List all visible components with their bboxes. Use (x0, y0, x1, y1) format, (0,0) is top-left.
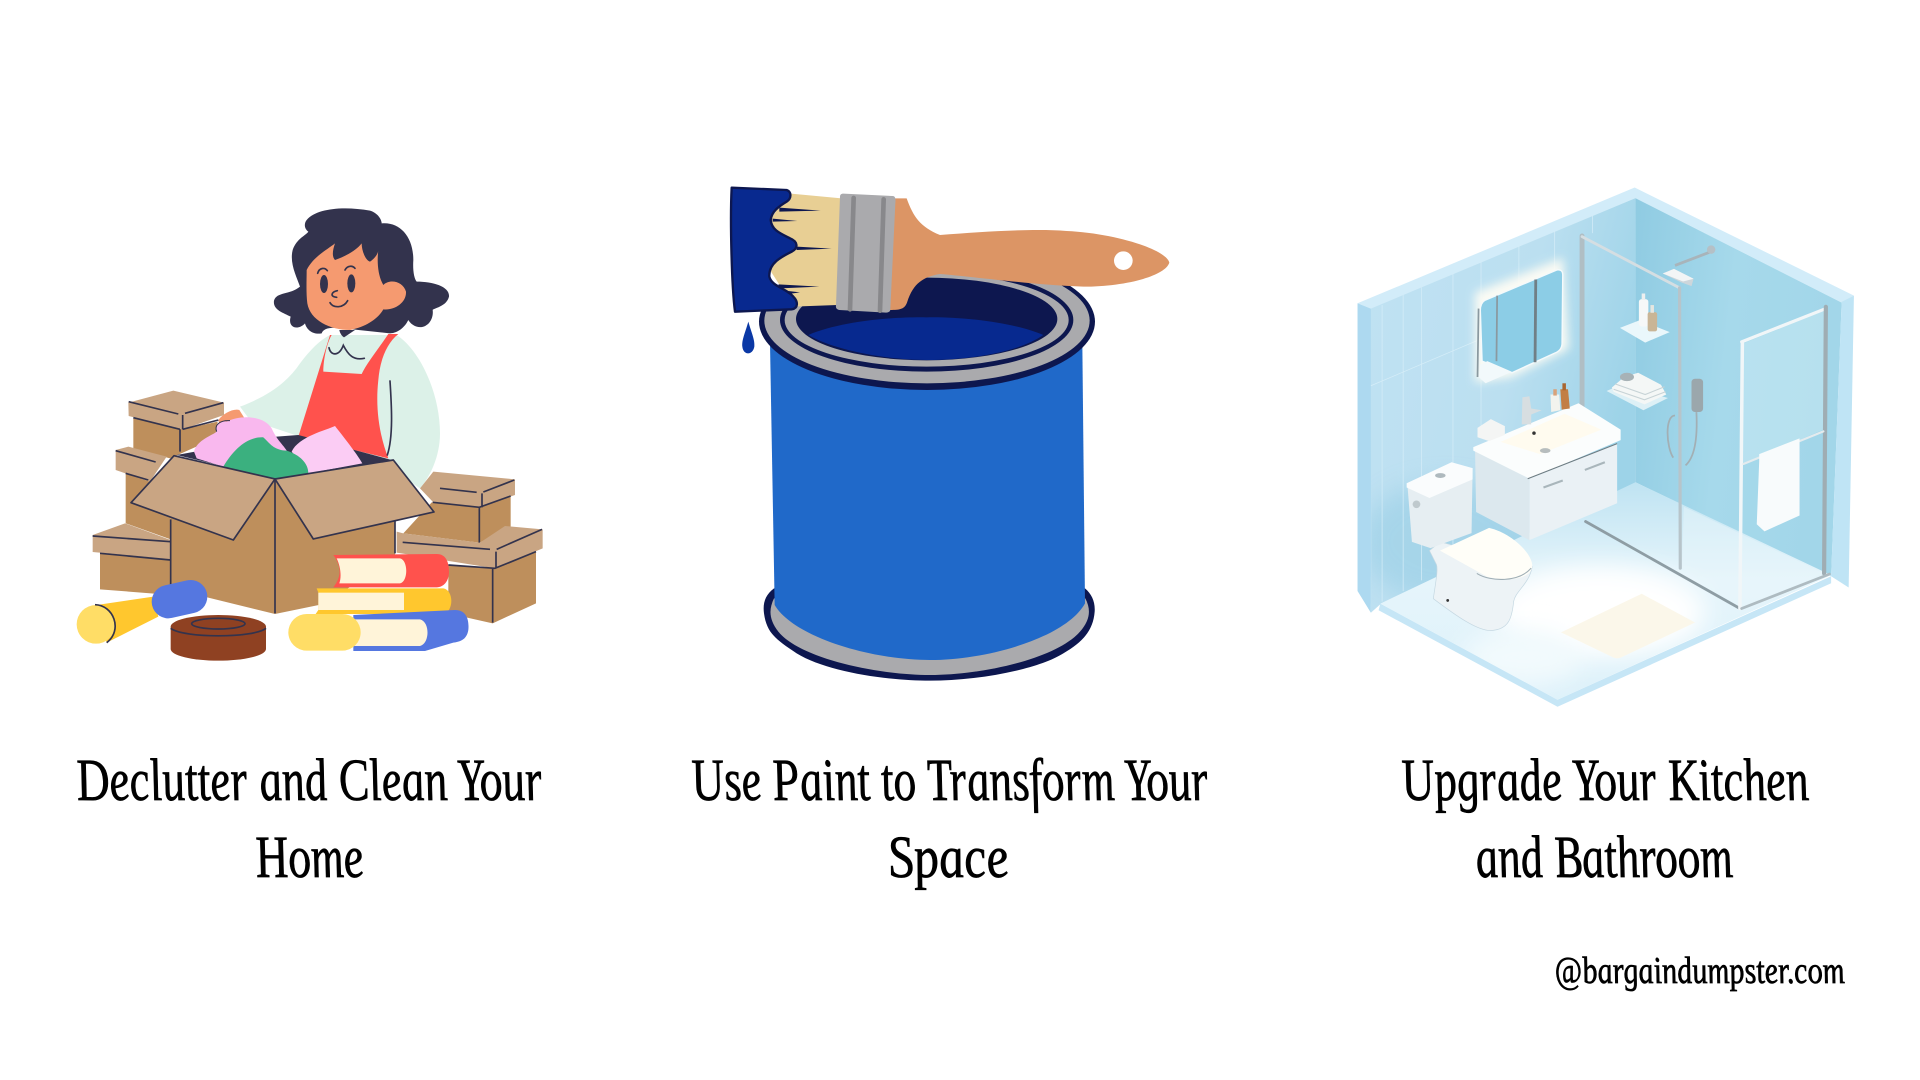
tile lines (1371, 216, 1593, 601)
can top rim and paint (759, 253, 1095, 390)
face (306, 243, 406, 330)
hair (274, 208, 449, 334)
heading: paint: Use Paint to Transform Your (686, 747, 1214, 814)
can bottom rim (764, 588, 1095, 681)
brush handle (890, 198, 1169, 310)
panel: bathroom illustration (1358, 188, 1854, 707)
brush bristles (770, 193, 842, 307)
heading: paint: Space (883, 824, 1013, 891)
heading: declutter (70, 747, 548, 891)
heading: declutter: Home (249, 824, 368, 891)
paint on brush (731, 188, 797, 312)
shelves and bottles (1607, 293, 1670, 410)
red apron (298, 334, 398, 458)
hand (218, 410, 244, 426)
shower enclosure (1582, 236, 1829, 609)
open cardboard box with clothes (131, 417, 434, 614)
stacked boxes left (93, 391, 224, 595)
brush ferrule (836, 194, 896, 313)
can body (770, 343, 1085, 660)
panel: paint can illustration (731, 188, 1169, 681)
heading: kitchen and bathroom: and Bathroom (1470, 824, 1737, 891)
collar and sleeve lines (329, 345, 392, 455)
neck shadow (339, 330, 355, 337)
website credit: @bargaindumpster.com (1551, 950, 1847, 992)
floor (1379, 482, 1831, 707)
handle hole (1114, 251, 1133, 270)
woman's shirt (240, 335, 440, 488)
heading: declutter: Declutter and Clean Your (70, 747, 548, 814)
heading: paint (686, 747, 1214, 891)
flashlight (77, 597, 191, 644)
panel: declutter illustration (77, 208, 543, 661)
room walls (1358, 188, 1854, 613)
towel (1757, 438, 1800, 531)
paint drop (742, 322, 754, 353)
heading: kitchen and bathroom (1396, 747, 1813, 891)
vanity with sink (1473, 383, 1621, 540)
bristle hairlines (773, 208, 832, 294)
toilet (1407, 462, 1532, 631)
facial features (318, 266, 355, 307)
tape roll (171, 615, 266, 661)
bath mat (1561, 594, 1695, 658)
books (288, 554, 469, 651)
mirror with glow (1475, 258, 1569, 383)
stacked boxes right (397, 472, 543, 623)
